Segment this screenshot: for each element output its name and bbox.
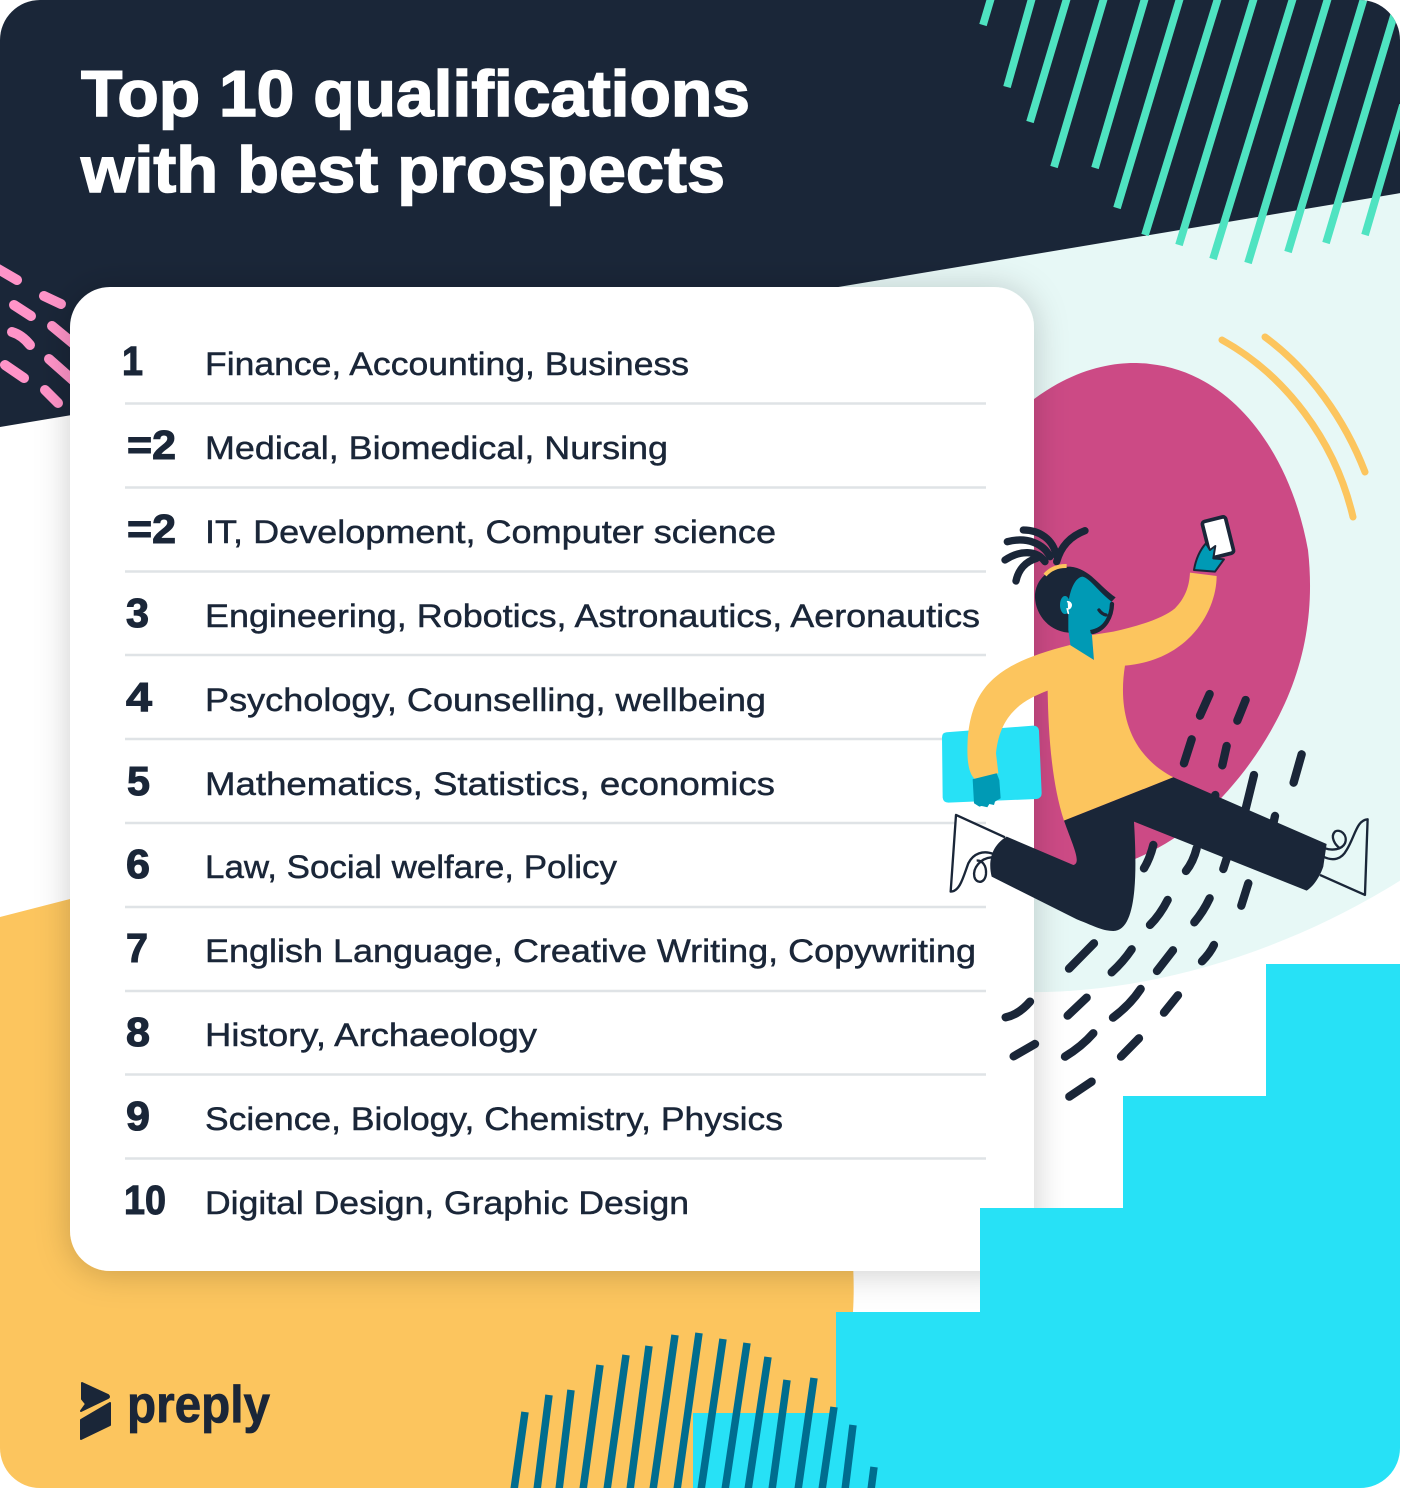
logo mark — [81, 1383, 110, 1439]
row 6: 5 — [127, 758, 150, 804]
lower hand — [973, 773, 1001, 807]
row 6: Mathematics, Statistics, economics — [205, 766, 775, 802]
mouth — [1099, 610, 1106, 615]
row 5: Psychology, Counselling, wellbeing — [205, 682, 766, 718]
row 9: 8 — [126, 1009, 150, 1055]
row 2: =2 — [127, 422, 176, 468]
title: Top 10 qualifications — [81, 57, 750, 130]
upper hand — [1194, 543, 1224, 572]
row 3: =2 — [127, 506, 176, 552]
title: with best prospects — [80, 133, 725, 206]
magenta blob — [1034, 363, 1310, 865]
row 1: Finance, Accounting, Business — [205, 346, 689, 382]
row 4: 3 — [126, 590, 149, 636]
face — [1068, 577, 1112, 660]
hair band — [1045, 566, 1067, 575]
dreadlocks — [1005, 530, 1085, 581]
row 3: IT, Development, Computer science — [205, 514, 776, 550]
row 2: Medical, Biomedical, Nursing — [205, 430, 668, 466]
row 11: 10 — [124, 1177, 166, 1223]
dark header band — [0, 0, 1401, 427]
yellow arcs — [1222, 337, 1365, 517]
pink dashes — [0, 269, 75, 403]
ear — [1060, 596, 1070, 614]
row 5: 4 — [126, 674, 152, 720]
teal diagonal stripes — [983, 0, 1401, 263]
row 4: Engineering, Robotics, Astronautics, Aeronautics — [205, 598, 980, 634]
hair — [1035, 567, 1116, 634]
phone — [1202, 516, 1234, 558]
face outline — [1093, 604, 1112, 632]
logo wordmark: preply — [127, 1376, 270, 1434]
yellow background shape — [0, 860, 854, 1488]
left shoe — [951, 815, 1005, 892]
row 10: Science, Biology, Chemistry, Physics — [205, 1101, 783, 1137]
blue stripes at the bottom — [514, 1333, 874, 1488]
row 9: History, Archaeology — [205, 1017, 537, 1053]
neck and face — [1035, 567, 1116, 660]
mint background shape — [840, 193, 1400, 992]
title — [80, 57, 750, 206]
row 1: 1 — [122, 338, 143, 384]
sweater — [967, 573, 1217, 821]
trousers — [990, 777, 1327, 931]
right shoe — [1320, 819, 1368, 895]
icon: book — [942, 726, 1042, 803]
dark rain dashes — [1006, 694, 1302, 1097]
row 10: 9 — [126, 1093, 150, 1139]
row 7: 6 — [126, 841, 150, 887]
preply logo — [81, 1376, 270, 1439]
row 7: Law, Social welfare, Policy — [205, 849, 617, 885]
white list card — [70, 287, 1034, 1271]
row dividers — [125, 404, 986, 1158]
row 8: English Language, Creative Writing, Copywriting — [205, 933, 976, 969]
jumping character — [942, 516, 1368, 931]
row 11: Digital Design, Graphic Design — [205, 1185, 689, 1221]
cyan stairs — [693, 964, 1401, 1488]
earbud — [1067, 602, 1071, 613]
row 8: 7 — [126, 925, 148, 971]
